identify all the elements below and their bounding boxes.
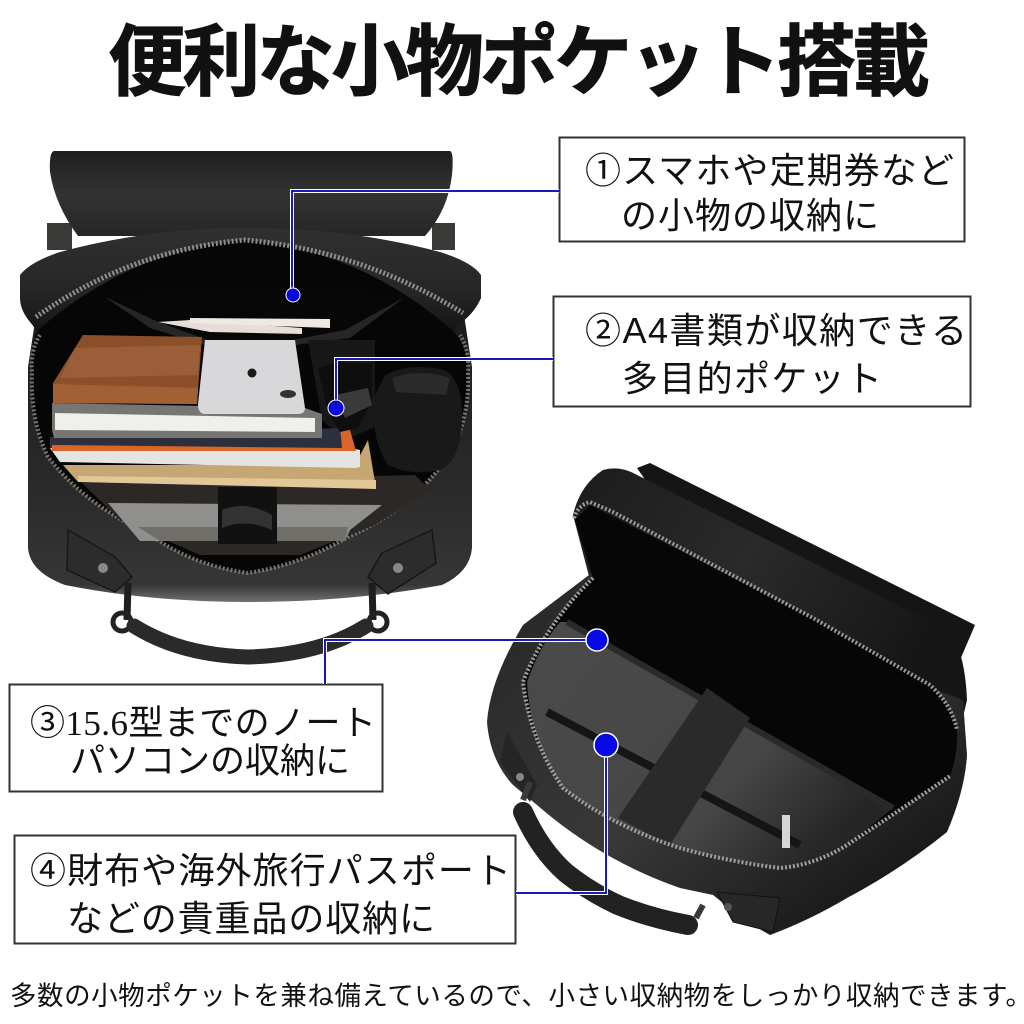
grey pocket	[527, 622, 893, 868]
phone camera	[280, 390, 296, 398]
callout 2	[554, 296, 970, 406]
lower zip	[32, 335, 468, 573]
callout 1: の小物の収納に	[621, 195, 879, 236]
pocket lip	[105, 284, 405, 340]
flap	[50, 151, 453, 236]
small bottle	[308, 340, 375, 440]
body zip	[523, 578, 950, 868]
callout 2: ②A4書類が収納できる	[585, 310, 967, 351]
strap	[218, 487, 277, 544]
small bottle cap	[318, 362, 372, 432]
body	[487, 572, 967, 935]
handle tabs	[67, 530, 132, 592]
magazine pages	[50, 448, 360, 468]
lid	[573, 468, 967, 730]
rivets	[98, 563, 108, 573]
callout 3: ③15.6型までのノート	[30, 704, 376, 743]
large bottle	[374, 367, 462, 472]
leader line 2	[328, 359, 553, 416]
cards	[158, 320, 302, 334]
rings	[127, 583, 373, 620]
callout 3: パソコンの収納に	[70, 742, 350, 781]
phone logo	[248, 368, 256, 378]
handle	[134, 626, 366, 657]
leader line 3	[325, 629, 608, 684]
pocket piping	[567, 622, 893, 808]
handle	[523, 812, 688, 925]
callout 4: などの貴重品の収納に	[67, 898, 435, 939]
lid zip	[574, 502, 957, 730]
strap	[618, 688, 750, 845]
phone	[198, 340, 305, 414]
back panel	[637, 463, 975, 660]
body	[28, 315, 472, 602]
side zip ends	[47, 223, 455, 250]
callout 1: ①スマホや定期券など	[585, 150, 954, 191]
puller	[782, 815, 790, 848]
interior	[31, 240, 468, 573]
leader line 4	[516, 733, 618, 893]
magazine cover	[50, 428, 350, 450]
callout 4	[14, 836, 516, 944]
grey book	[52, 403, 322, 438]
footer text: 多数の小物ポケットを兼ね備えているので、小さい収納物をしっかり収納できます。	[10, 981, 1024, 1011]
photo: open backpack, front view	[20, 151, 481, 657]
title: 便利な小物ポケット搭載	[108, 18, 930, 106]
top rim	[20, 228, 481, 332]
callout 2: 多目的ポケット	[622, 358, 882, 399]
top zip	[36, 240, 463, 317]
callout 1	[560, 138, 964, 242]
callout 3	[10, 684, 382, 792]
tablet	[63, 440, 376, 488]
leader line 1	[286, 191, 559, 302]
interior	[523, 505, 957, 868]
callout 4: ④財布や海外旅行パスポート	[30, 850, 511, 891]
brown wallet	[53, 335, 202, 404]
rings	[523, 782, 703, 918]
inner zip	[547, 712, 800, 845]
tabs	[500, 732, 537, 802]
dark back area	[82, 475, 430, 555]
photo: open backpack, angled view	[487, 463, 975, 935]
laptop	[108, 503, 382, 541]
